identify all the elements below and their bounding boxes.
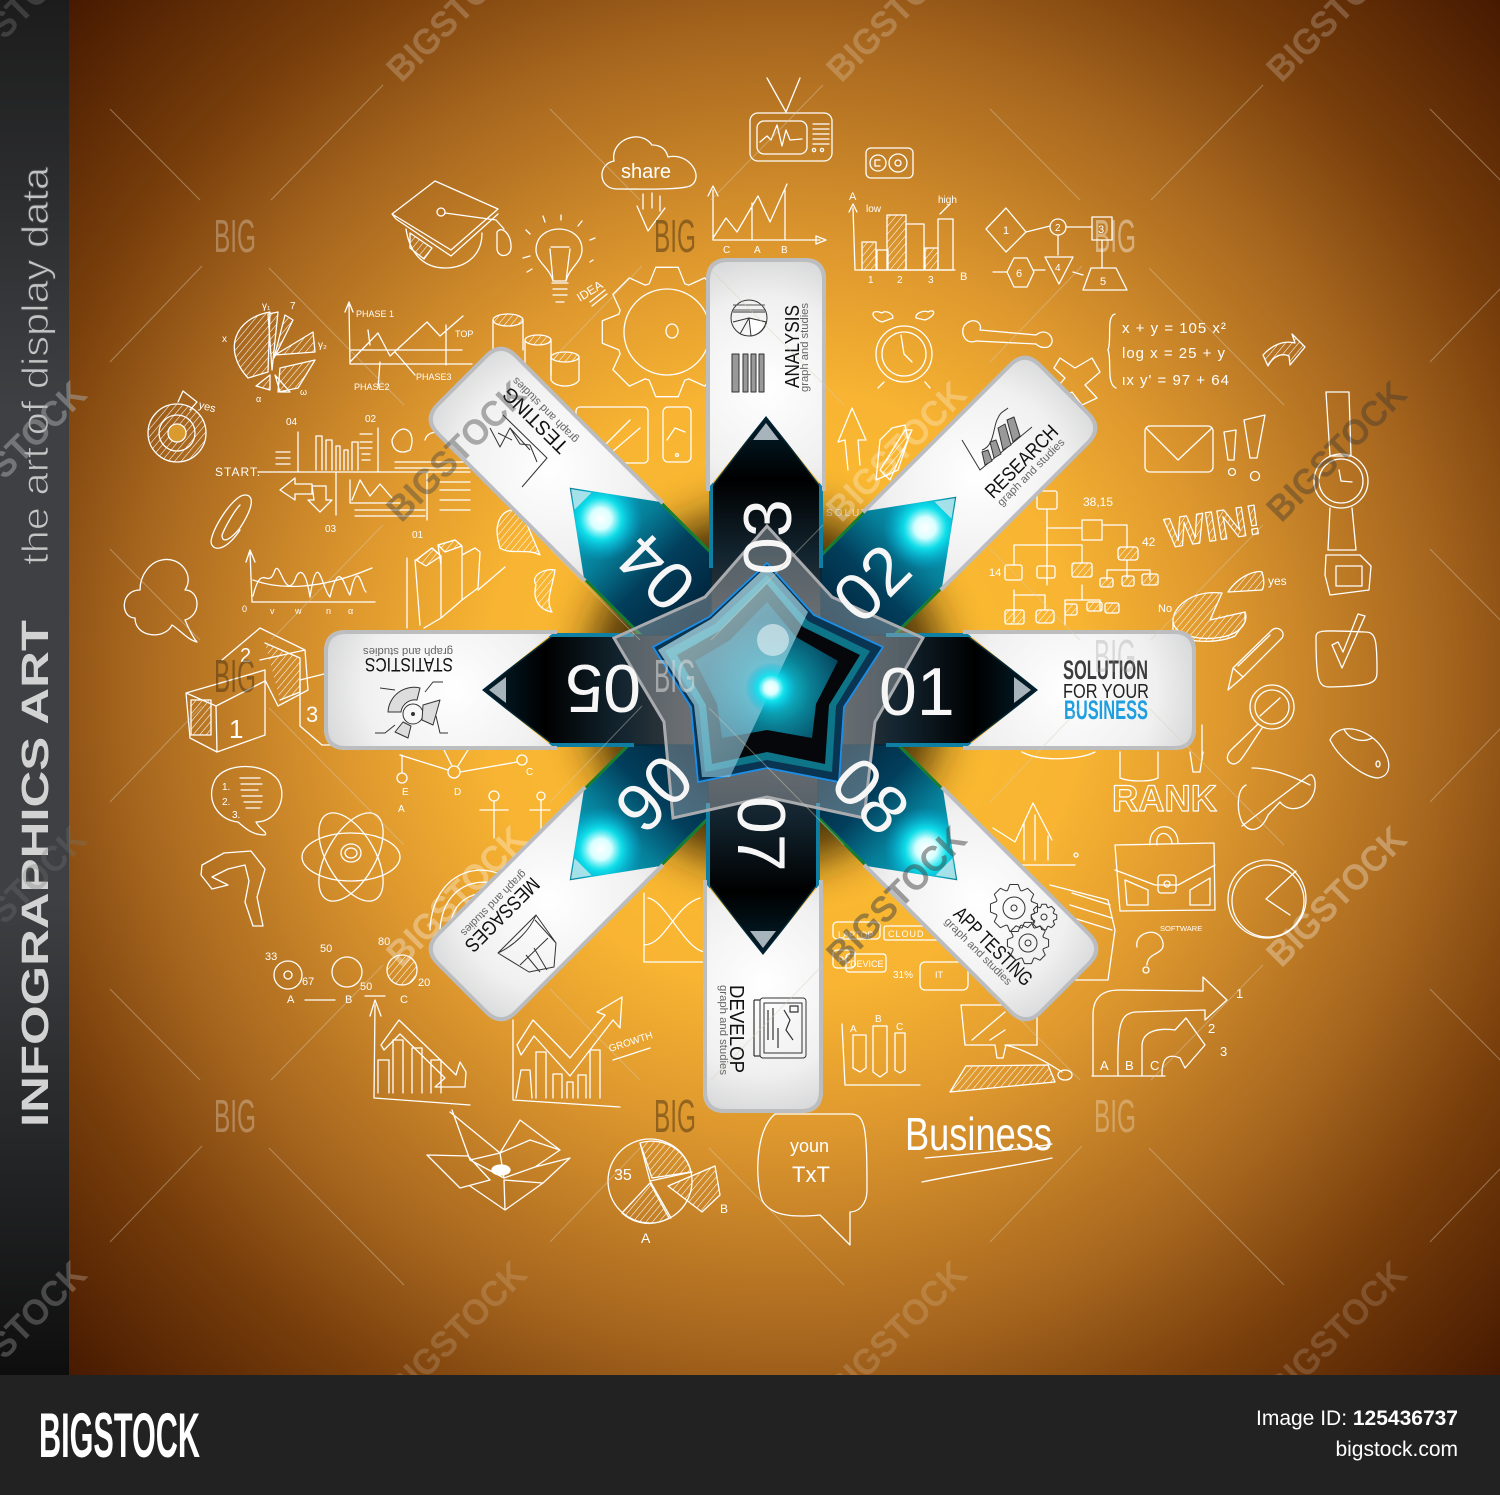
- doodle: phase chart: PHASE3: [416, 372, 452, 382]
- doodle: organisation chart: 42: [1142, 535, 1156, 549]
- doodle: small 3d bars: [842, 1014, 920, 1085]
- doodle: club cloud: [124, 559, 197, 642]
- doodle: start timeline: 02: [365, 414, 377, 425]
- doodle: wave chart: v: [270, 606, 275, 616]
- doodle: book stack: [1050, 885, 1115, 980]
- icon: pie and bars: [731, 300, 767, 392]
- doodle: three arrows: 3: [1220, 1044, 1227, 1059]
- doodle: percentage discs: [265, 936, 430, 1006]
- doodle: cylinders: [493, 314, 579, 386]
- doodle: paperclip: [211, 495, 251, 548]
- doodle: tablet and phone: [576, 407, 691, 463]
- doodle: pie coin: yes: [1268, 574, 1287, 588]
- doodle: go box: [866, 148, 913, 178]
- icon: laptop sketch: [754, 998, 806, 1058]
- doodle: three arrows: [1092, 977, 1243, 1076]
- doodle: graduation cap: [392, 181, 511, 268]
- doodle: speech bubble: TxT: [792, 1162, 830, 1187]
- petal 04 testing: graph and studies: [510, 374, 581, 445]
- doodle: organisation chart: 38,15: [1083, 495, 1113, 509]
- petal 06 messages: [422, 677, 773, 1028]
- doodle: start timeline: [215, 414, 470, 541]
- doodle: brain and hatching: [497, 510, 555, 612]
- doodle: list speech bubble: 1.: [222, 782, 230, 793]
- doodle: list speech bubble: [212, 766, 282, 835]
- doodle: laptop cloud device: CLOUD: [888, 929, 925, 939]
- doodle: glasses: [1238, 768, 1315, 829]
- site address: bigstock.com: [1335, 1438, 1458, 1461]
- central star: [614, 526, 923, 818]
- doodle: triangle chart: [993, 803, 1078, 865]
- petal 03 analysis: graph and studies: [799, 302, 811, 392]
- doodle: share cloud: share: [621, 161, 671, 183]
- doodle: laptop cloud device: 31%: [893, 970, 913, 981]
- watermark row 2: BIGSTOCK: [378, 373, 534, 529]
- watermark row 4: [0, 1253, 1414, 1409]
- doodle: percentage discs: 80: [378, 936, 390, 948]
- star layer dark: [677, 584, 860, 764]
- doodle: percentage discs: C: [400, 994, 408, 1006]
- doodle: start timeline: START.: [215, 465, 261, 479]
- card title solution for your business: SOLUTION: [1063, 655, 1148, 685]
- doodle: win text: WIN!: [1162, 496, 1264, 557]
- step numbers: 05: [565, 650, 641, 726]
- doodle: spiral target: yes: [197, 399, 217, 415]
- doodle: laptop cloud device: DEVICE: [850, 959, 884, 969]
- star core: [695, 602, 838, 738]
- doodle: three arrows: A: [1100, 1058, 1109, 1073]
- petal 02 research: RESEARCH: [981, 421, 1063, 503]
- footer bar: BIGSTOCK: [39, 1401, 200, 1471]
- doodle: exploded pie: γ₁: [262, 301, 271, 312]
- doodle: flow chart: 5: [1100, 276, 1106, 288]
- star layer teal: [665, 575, 870, 772]
- image id: Image ID: 125436737: [1256, 1407, 1458, 1430]
- doodle: number cubes: [186, 628, 340, 752]
- icon: message chart: [498, 915, 556, 972]
- doodle: pie coin: [1158, 572, 1287, 641]
- sidebar subtitle: the art of display data: [15, 167, 56, 565]
- step numbers: 01: [879, 654, 955, 730]
- doodle: atom: [302, 803, 400, 911]
- doodle: alarm clock: [873, 311, 934, 388]
- doodle: wave chart: [242, 550, 375, 616]
- big marks: BIG: [1094, 1090, 1136, 1142]
- petal 06 messages: graph and studies: [458, 868, 529, 939]
- doodle: briefcase: [1115, 827, 1215, 911]
- doodle: rank text: RANK: [1112, 778, 1217, 819]
- doodle: percentage discs: B: [345, 994, 352, 1006]
- doodle: network nodes: [397, 750, 533, 798]
- doodle: wave chart: 0: [242, 604, 247, 614]
- icon: gears: [990, 884, 1057, 964]
- petal 07 develop: DEVELOP: [725, 985, 747, 1073]
- doodle: television: [750, 78, 832, 161]
- petal 08 app testing: [754, 677, 1105, 1028]
- doodle: curve chart: [644, 893, 705, 962]
- doodle: open box: [427, 1110, 570, 1210]
- doodle: bar chart high low: 1: [868, 275, 874, 286]
- doodle: checkbox: [1316, 614, 1377, 687]
- petal 08 app testing: APP TESTING: [949, 903, 1037, 991]
- sidebar: [0, 0, 69, 1375]
- watermark row 1: [0, 0, 1414, 89]
- icon: testing chart: [490, 415, 547, 487]
- doodle: large gear: [602, 267, 732, 397]
- doodle: pie chart ab: 35: [614, 1167, 632, 1184]
- doodle: business lettering: Business: [905, 1108, 1052, 1160]
- doodle: speech bubble: [758, 1114, 867, 1245]
- glass wedge: [658, 566, 808, 777]
- doodle: organisation chart: 14: [989, 567, 1001, 579]
- doodle: wave chart: w: [294, 606, 302, 616]
- card title solution for your business: BUSINESS: [1064, 695, 1148, 725]
- petal 05 statistics: graph and studies: [362, 645, 453, 657]
- step numbers: 04: [603, 518, 710, 626]
- petal 01 solution: [826, 630, 1196, 750]
- watermark row 2: BIGSTOCK: [1258, 373, 1414, 529]
- big marks: BIG: [214, 210, 256, 262]
- doodle: bar chart high low: 3: [928, 275, 934, 286]
- doodle: percentage discs: A: [287, 994, 295, 1006]
- doodle: small 3d bars: C: [896, 1022, 903, 1033]
- doodle: list speech bubble: 3.: [232, 810, 240, 821]
- big marks: [214, 210, 1136, 1142]
- doodle: computer and keyboard: [950, 1005, 1072, 1092]
- doodle: magnifier: [1227, 685, 1294, 764]
- doodle: network nodes: C: [526, 767, 533, 778]
- doodle: pie chart ab: [608, 1139, 728, 1246]
- doodle: pencil: [1228, 628, 1283, 690]
- big marks: BIG: [654, 210, 696, 262]
- doodle: exploded pie: α: [256, 394, 261, 404]
- petal 07 develop: [703, 743, 823, 1113]
- doodle: network nodes: D: [454, 787, 461, 798]
- petal 04 testing: TESTING: [498, 382, 573, 457]
- doodle: wave chart: n: [326, 606, 331, 616]
- doodle: wrench: [963, 321, 1052, 348]
- doodle: 3d bars: [407, 540, 505, 628]
- doodle: falling chart: [370, 1000, 470, 1105]
- doodle: phase chart: [345, 302, 473, 392]
- watermark row 4: BIGSTOCK: [1258, 1253, 1414, 1409]
- doodle: start timeline: 03: [325, 524, 337, 535]
- petal 05 statistics: STATISTICS: [365, 653, 453, 674]
- doodle: number cubes: 1: [229, 714, 243, 744]
- doodle: exclamation marks: [1224, 415, 1265, 480]
- doodle: number three: [201, 851, 265, 926]
- doodle: small 3d bars: A: [850, 1024, 857, 1035]
- doodle: peak chart: A: [754, 245, 761, 256]
- big marks: BIG: [1094, 210, 1136, 262]
- petal 06 messages: MESSAGES: [460, 873, 544, 956]
- big marks: BIG: [1094, 630, 1136, 682]
- doodle: percentage discs: 67: [302, 976, 314, 988]
- doodle: exploded pie: x: [222, 334, 227, 345]
- doodle: equations: ιx y' = 97 + 64: [1122, 372, 1230, 389]
- petal 03 analysis: [706, 258, 826, 628]
- petal 05 statistics: [324, 630, 694, 750]
- doodle: bar chart high low: low: [866, 204, 882, 215]
- doodle: peak chart: C: [723, 245, 730, 256]
- doodle: bar chart high low: [849, 191, 967, 286]
- doodle: phase chart: PHASE2: [354, 382, 390, 392]
- petal 02 research: graph and studies: [995, 436, 1068, 509]
- doodle: wave chart: α: [348, 606, 353, 616]
- doodle: three arrows: 1: [1236, 986, 1243, 1001]
- doodle: light bulb: IDEA: [574, 278, 605, 305]
- doodle: laptop cloud device: [833, 922, 968, 990]
- doodle: bar chart high low: high: [938, 195, 957, 206]
- doodle: flow chart: [986, 208, 1127, 290]
- doodle: speech bubble: youn: [790, 1136, 829, 1156]
- doodle: stick figures: [398, 791, 550, 838]
- doodle: three arrows: B: [1125, 1058, 1134, 1073]
- doodle: bar chart high low: B: [960, 271, 967, 283]
- doodle: flow chart: 2: [1055, 223, 1061, 234]
- doodle: flow chart: 4: [1055, 263, 1061, 274]
- doodle: puzzle shape: [1054, 358, 1100, 405]
- watermark row 2: BIGSTOCK: [818, 373, 974, 529]
- doodle: percentage discs: 50: [320, 943, 332, 955]
- card title solution for your business: FOR YOUR: [1063, 681, 1149, 703]
- petal 02 research: [753, 349, 1104, 700]
- doodle: striped arrow: [1263, 334, 1305, 366]
- watermark row 3: BIGSTOCK: [818, 818, 974, 974]
- doodle: start timeline: 01: [412, 530, 424, 541]
- doodle: exploded pie: γ₂: [318, 340, 327, 351]
- doodle: equations: x + y = 105 x²: [1122, 320, 1227, 337]
- footer bar: [0, 1375, 1500, 1495]
- doodle: wall clock: [1228, 860, 1306, 938]
- doodle: percentage discs: 50: [360, 981, 372, 993]
- doodle: exploded pie: ω: [300, 387, 307, 397]
- doodle: phase chart: PHASE 1: [356, 309, 394, 319]
- doodle: flow chart: 3: [1098, 224, 1104, 236]
- doodle: wrist watch: [1314, 392, 1371, 595]
- doodle: organisation chart: [989, 491, 1158, 625]
- doodle: small 3d bars: B: [875, 1014, 882, 1025]
- doodle: pie coin: No: [1158, 603, 1172, 615]
- petal 04 testing: [422, 340, 773, 691]
- petal 08 app testing: graph and studies: [942, 916, 1014, 988]
- doodle: start timeline: 04: [286, 417, 298, 428]
- icon: growth chart: [962, 408, 1032, 470]
- big marks: BIG: [654, 1090, 696, 1142]
- doodle: laptop cloud device: IT: [935, 970, 944, 980]
- inner blue star: [653, 563, 883, 782]
- doodle: hidden arrows and solution: SOLUTION: [826, 508, 893, 519]
- petal 03 analysis: ANALYSIS: [782, 305, 804, 388]
- doodle: bar chart high low: A: [849, 191, 857, 203]
- doodle: stick figures: A: [398, 804, 405, 815]
- doodle: percentage discs: 33: [265, 951, 277, 963]
- doodle: exploded pie: [222, 301, 327, 404]
- doodle: question mark: SOFTWARE: [1160, 924, 1202, 933]
- doodle: number cubes: 2: [240, 645, 251, 667]
- doodle: growth chart: [513, 997, 654, 1107]
- hand drawn doodles: [124, 78, 1389, 1246]
- doodle: exploded pie: 7: [290, 301, 296, 312]
- doodle: bar chart high low: 2: [897, 275, 903, 286]
- doodle: equations: [1108, 314, 1230, 389]
- doodle: laptop cloud device: LAPTOP: [838, 930, 873, 940]
- doodle: hidden arrows and solution: [826, 408, 912, 519]
- doodle: laptop cloud device: PC: [838, 955, 851, 965]
- doodle: flow chart: 6: [1016, 268, 1022, 280]
- doodle: list speech bubble: 2.: [222, 797, 230, 808]
- step numbers: [565, 499, 955, 872]
- star highlights: [757, 624, 789, 656]
- watermark row 4: BIGSTOCK: [818, 1253, 974, 1409]
- outer glass star: [614, 526, 923, 818]
- doodle: three arrows: C: [1150, 1058, 1159, 1073]
- doodle: business lettering: [905, 1108, 1052, 1182]
- doodle: network nodes: E: [402, 787, 409, 798]
- step numbers: 03: [730, 499, 806, 575]
- doodle: percentage discs: 20: [418, 977, 430, 989]
- doodle: three arrows: 2: [1208, 1021, 1215, 1036]
- step numbers: 08: [817, 742, 924, 850]
- big marks: BIG: [214, 1090, 256, 1142]
- watermark row 3: [0, 818, 1414, 974]
- doodle: number cubes: 3: [306, 702, 318, 727]
- doodle: light bulb: [523, 215, 607, 306]
- doodle: spiral target: [148, 391, 217, 462]
- sidebar title: INFOGRAPHICS ART: [15, 620, 57, 1127]
- doodle: equations: log x = 25 + y: [1122, 345, 1226, 362]
- doodle: share cloud: [602, 137, 696, 231]
- doodle: envelope: [1145, 426, 1213, 472]
- central shadow: [586, 508, 946, 868]
- watermark row 3: BIGSTOCK: [1258, 818, 1414, 974]
- watermark row 4: BIGSTOCK: [378, 1253, 534, 1409]
- doodle: growth chart: GROWTH: [608, 1030, 654, 1055]
- big marks: BIG: [654, 650, 696, 702]
- big marks: BIG: [214, 650, 256, 702]
- watermark row 3: BIGSTOCK: [378, 818, 534, 974]
- doodle: computer mouse: [1330, 729, 1389, 778]
- doodle: pie chart ab: B: [720, 1202, 728, 1216]
- card title solution for your business: [1063, 655, 1149, 725]
- icon: radial diagram: [375, 682, 448, 738]
- doodle: peak chart: B: [781, 245, 788, 256]
- infographic wheel: [324, 258, 1196, 1113]
- doodle: bottle under card: [1022, 725, 1203, 781]
- watermark row 2: [0, 373, 1414, 529]
- doodle: question mark: [1137, 924, 1202, 973]
- step numbers: 07: [723, 796, 799, 872]
- step numbers: 02: [818, 530, 926, 637]
- step numbers: 06: [600, 740, 708, 847]
- petal 07 develop: graph and studies: [717, 985, 729, 1076]
- doodle: peak chart: [708, 184, 826, 256]
- doodle: phase chart: TOP: [455, 329, 473, 339]
- doodle: flow chart: 1: [1003, 225, 1009, 237]
- doodle: pie chart ab: A: [641, 1230, 651, 1246]
- doodle: rainbow arcs: [430, 870, 502, 930]
